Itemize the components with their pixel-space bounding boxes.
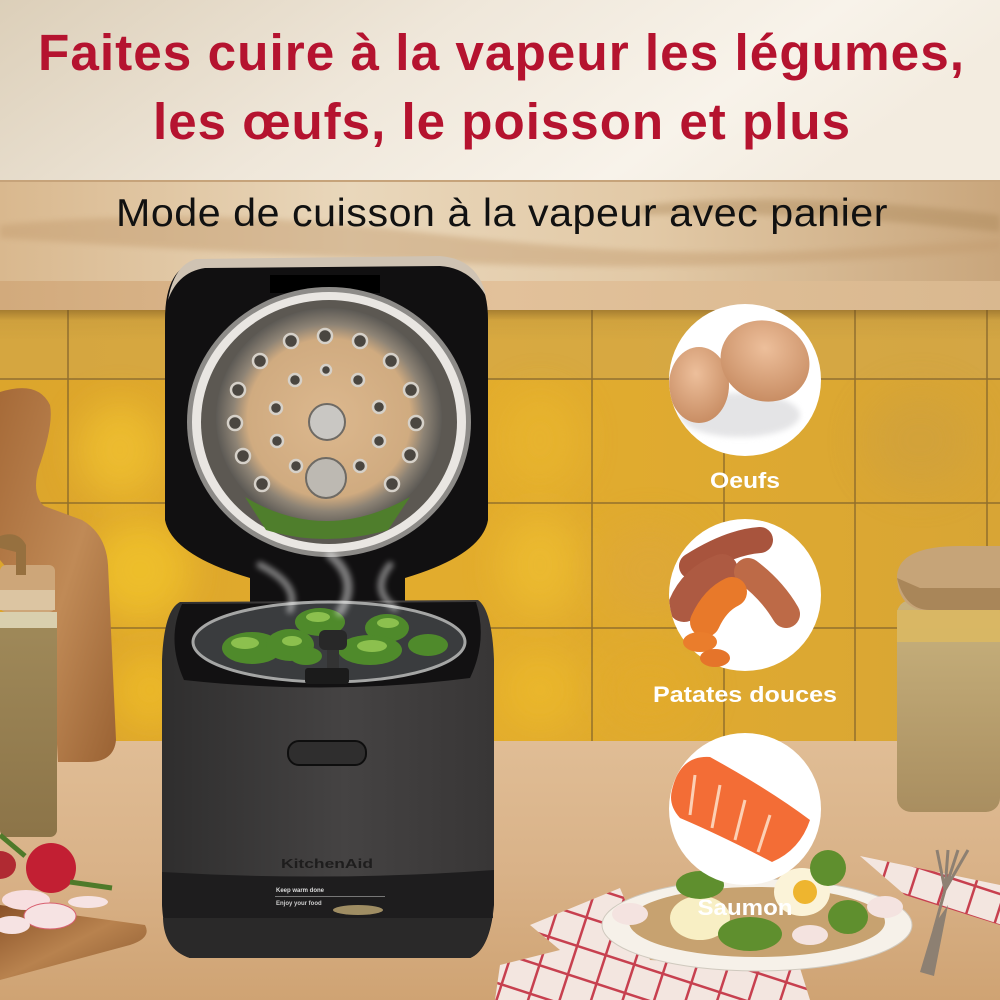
control panel: Keep warm done (276, 888, 325, 894)
background wall (0, 0, 1000, 182)
photo circle: eggs (669, 304, 821, 456)
open lid (165, 256, 488, 610)
photo circle: salmon (669, 733, 821, 885)
rice cooker (162, 256, 494, 958)
brand: KitchenAid (281, 856, 373, 871)
steam (260, 555, 395, 612)
kitchen counter (0, 741, 1000, 1000)
label: salmon: Saumon (698, 895, 792, 920)
steamer basket (193, 602, 465, 682)
glass jar left (0, 534, 57, 837)
inner rim (174, 602, 481, 688)
tiled wall (0, 310, 1000, 741)
base body (162, 600, 494, 958)
title (38, 24, 965, 150)
photo circle: sweet potatoes (669, 519, 821, 671)
control panel (162, 870, 494, 958)
label: sweet potatoes: Patates douces (653, 682, 837, 707)
cutting board on wall (0, 388, 116, 762)
label: eggs: Oeufs (710, 468, 780, 493)
control panel: Enjoy your food (276, 901, 322, 907)
glass jar right (897, 546, 1000, 812)
title: les œufs, le poisson et plus (153, 93, 851, 150)
lid handle (288, 741, 366, 765)
fork (920, 850, 968, 976)
wooden shelf (0, 180, 1000, 311)
title: Faites cuire à la vapeur les légumes, (38, 24, 965, 81)
broccoli (222, 608, 448, 668)
radishes and small board (0, 835, 147, 980)
plate of food (495, 850, 1000, 1000)
subtitle: Mode de cuisson à la vapeur avec panier (116, 192, 888, 235)
